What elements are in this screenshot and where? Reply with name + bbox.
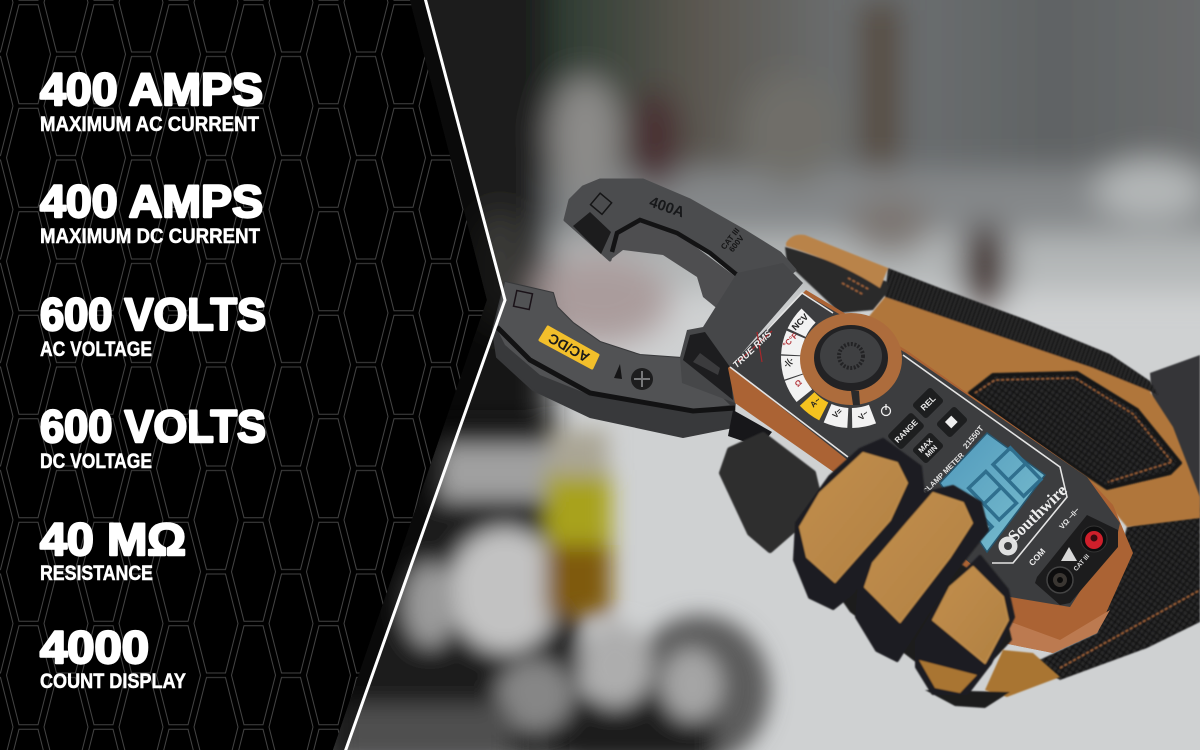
spec list [40, 64, 266, 693]
function dial labels: -|(- [782, 355, 795, 369]
spec: 400 amps DC: 400 AMPS [40, 176, 263, 227]
spec: 40 megohm [40, 514, 186, 585]
button: RANGE [887, 412, 925, 450]
spec: 400 amps AC: 400 AMPS [40, 64, 263, 115]
text: category rating: CAT III [719, 226, 741, 251]
spec: 400 amps DC [40, 176, 263, 248]
clamp jaws [493, 180, 803, 447]
function dial labels [781, 312, 873, 422]
spec: 400 amps AC: MAXIMUM AC CURRENT [40, 113, 259, 136]
function dial labels: V~ [857, 408, 870, 422]
upper jaw [565, 180, 795, 315]
white angled divider line [345, 0, 505, 750]
glove: rubber pad [970, 373, 1180, 488]
label: AC/DC sticker [540, 327, 598, 368]
finger 3 [917, 557, 1013, 693]
screw [631, 368, 653, 390]
input jack panel: CAT III [1073, 553, 1091, 573]
button: MAX MIN: MAX [916, 436, 935, 455]
text: input markings: VΩ ⊣⊢ [1057, 505, 1082, 531]
blurred workshop background [300, 0, 1200, 750]
function dial labels: Ω [793, 377, 804, 389]
text: COM: COM [1027, 546, 1047, 568]
text: 400A marking: 400A [647, 194, 687, 221]
glove: hand and fingers [722, 435, 1060, 708]
button: RANGE: RANGE [893, 417, 920, 445]
input jack panel [1035, 515, 1118, 605]
finger 1 [795, 440, 923, 608]
wrist and glove back layer [1033, 355, 1200, 680]
spec: 600 volts AC: 600 VOLTS [40, 289, 266, 340]
Southwire logo: Southwire [1004, 480, 1071, 546]
spec: 600 volts DC: 600 VOLTS [40, 401, 266, 452]
black spec panel with hexagon pattern [0, 0, 487, 750]
spec: 600 volts AC: AC VOLTAGE [40, 338, 152, 361]
function dial labels: A~ [808, 395, 822, 409]
spec: 4000 count: 4000 [40, 622, 149, 673]
spec: 600 volts DC [40, 401, 266, 473]
finger 2 [857, 487, 987, 660]
meter body [728, 290, 1133, 653]
button: REL [912, 387, 944, 419]
spec: 400 amps DC: MAXIMUM DC CURRENT [40, 225, 260, 248]
text: category rating: 600V [727, 233, 746, 254]
face plate [729, 293, 1120, 607]
rotary dial [800, 313, 902, 405]
spec: 4000 count [40, 622, 186, 693]
glove: felt thumb pad [722, 435, 817, 550]
function dial labels: °C°F [781, 331, 800, 350]
jaw hinge connector [728, 410, 772, 447]
glove: lower tan cuff [985, 650, 1060, 697]
glove: thumb [785, 235, 1200, 527]
text: clamp meter: CLAMP METER [921, 450, 966, 496]
text: true RMS logo: TRUE RMS [731, 328, 775, 371]
function dial labels: NCV [790, 312, 810, 332]
meter neck [680, 263, 803, 403]
lower jaw [493, 282, 735, 437]
button: MAX MIN: MIN [923, 443, 939, 459]
spec: 40 megohm: RESISTANCE [40, 562, 153, 585]
icon: power [882, 404, 890, 416]
orange housing [728, 290, 1133, 653]
glove: finger base shadow [800, 480, 1012, 696]
button: backlight [936, 406, 968, 438]
button: REL: REL [918, 393, 938, 413]
spec: 400 amps AC [40, 64, 263, 136]
button: MAX MIN [912, 432, 944, 464]
spec: 600 volts DC: DC VOLTAGE [40, 450, 152, 473]
translucent angled band [333, 0, 505, 750]
glove: palm tan [919, 660, 977, 693]
white bezel lines [730, 293, 1067, 563]
spec: 40 megohm: 40 MΩ [40, 514, 186, 565]
text: model number: 21550T [961, 424, 986, 451]
spec: 4000 count: COUNT DISPLAY [40, 670, 186, 693]
LCD display [940, 433, 1045, 552]
spec: 600 volts AC [40, 289, 266, 361]
glove: lower palm edge [925, 690, 1010, 708]
function dial labels: V= [831, 406, 844, 420]
label: AC/DC sticker: AC/DC [545, 330, 592, 366]
